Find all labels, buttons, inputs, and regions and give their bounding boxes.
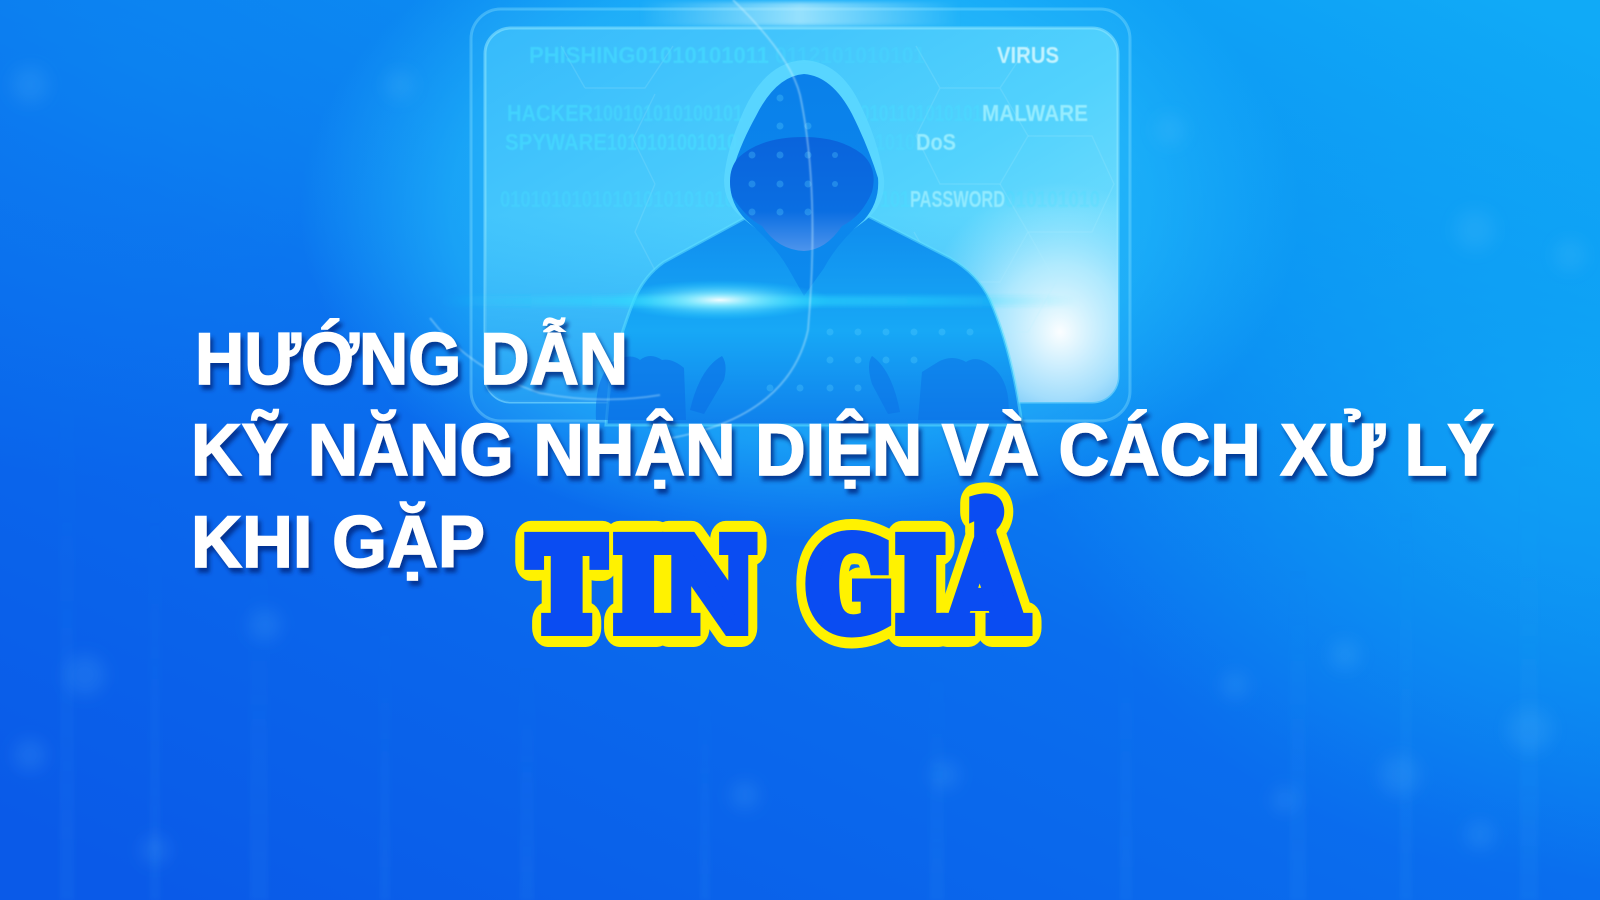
- data text: VIRUS: [997, 42, 1059, 68]
- data text: 100101010100101: [593, 100, 743, 126]
- data text: 010101010: [1005, 186, 1100, 212]
- white glow: [950, 194, 1118, 402]
- data text: MALWARE: [982, 100, 1088, 126]
- screen bottom fade: [485, 28, 1118, 402]
- blue fill: TIN GIẢ: [530, 501, 1027, 658]
- hacker hood: [730, 74, 878, 296]
- title line 1: HƯỚNG DẪN: [195, 319, 628, 400]
- lens flare: [440, 280, 1080, 320]
- title line 3: KHI GẶP: [191, 502, 485, 583]
- vertical light streaks: [60, 380, 1538, 900]
- data text: PASSWORD: [910, 186, 1005, 212]
- data text: 1010101001010: [607, 129, 737, 155]
- panel: holographic screen: [471, 2, 1130, 421]
- data text: [500, 42, 1100, 212]
- data text: PHISHING01010101011: [529, 42, 769, 68]
- screen outer frame: [471, 9, 1130, 421]
- highlighted heading: TIN GIẢ: [530, 501, 1027, 658]
- data text: SPYWARE: [505, 129, 607, 155]
- right hand: [869, 356, 1009, 420]
- icon: hooded hacker: [596, 60, 1022, 425]
- data text: 0101: [870, 186, 910, 212]
- data text: 01010101010101010101010: [500, 186, 735, 212]
- hacker body: [606, 216, 1022, 425]
- hacker face: [730, 137, 874, 251]
- curved light streaks: [430, 0, 812, 440]
- left hand: [596, 356, 726, 420]
- hood rim: [724, 60, 884, 232]
- top frame glow: [640, 2, 960, 26]
- data text: 1010: [875, 129, 915, 155]
- data text: 0101101010101: [860, 100, 982, 126]
- data text: DoS: [916, 129, 956, 155]
- screen inner panel: [485, 28, 1118, 402]
- data text: 0112101010101: [775, 42, 925, 68]
- title line 2: KỸ NĂNG NHẬN DIỆN VÀ CÁCH XỬ LÝ: [191, 410, 1494, 491]
- yellow outline: TIN GIẢ: [530, 501, 1027, 658]
- dot grid: [748, 94, 974, 392]
- title: [191, 319, 1494, 583]
- data text: HACKER: [507, 100, 593, 126]
- hexagon grid: [560, 46, 1114, 270]
